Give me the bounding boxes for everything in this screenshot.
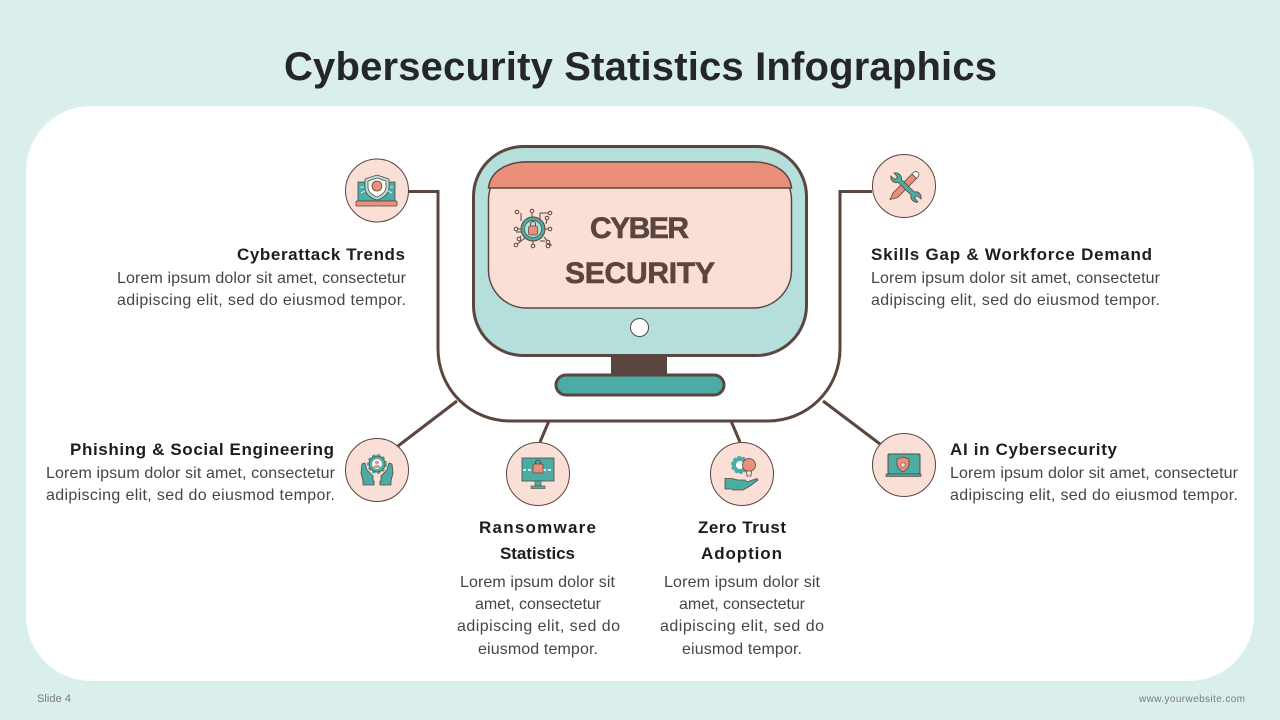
monitor stand xyxy=(611,354,667,376)
heading: Skills Gap & Workforce Demand xyxy=(871,245,1152,264)
item: Phishing & Social Engineering xyxy=(46,438,408,504)
item: Skills Gap & Workforce Demand xyxy=(871,154,1161,309)
title: Cybersecurity Statistics Infographics xyxy=(284,45,997,89)
icon circle: laptop shield xyxy=(346,159,408,222)
monitor body xyxy=(474,146,806,356)
monitor screen xyxy=(488,162,792,308)
monitor label xyxy=(565,212,715,290)
heading: Zero Trust xyxy=(698,518,786,537)
monitor base xyxy=(556,375,724,395)
body text: amet, consectetur xyxy=(475,596,602,613)
body text xyxy=(950,465,1239,504)
item: AI in Cybersecurity xyxy=(872,434,1239,504)
heading: Adoption xyxy=(701,544,782,563)
body text: adipiscing elit, sed do xyxy=(457,618,620,635)
item: Cyberattack Trends xyxy=(117,159,408,309)
body text xyxy=(117,270,407,309)
footer: slide number: Slide 4 xyxy=(37,693,71,705)
body text: Lorem ipsum dolor sit amet, consectetur xyxy=(117,270,407,287)
screen header band xyxy=(488,162,792,188)
body text: adipiscing elit, sed do eiusmod tempor. xyxy=(950,487,1238,504)
monitor label: SECURITY xyxy=(565,257,715,290)
icon circle: hand with gear and bulb xyxy=(710,442,774,506)
body text: adipiscing elit, sed do eiusmod tempor. xyxy=(117,292,406,309)
body text: Lorem ipsum dolor sit amet, consectetur xyxy=(950,465,1239,482)
body text: Lorem ipsum dolor sit amet, consectetur xyxy=(46,465,336,482)
icon circle: hands and gear xyxy=(346,438,408,502)
body text xyxy=(871,270,1161,309)
body text xyxy=(46,465,336,504)
monitor label: CYBER xyxy=(590,212,689,245)
body text: eiusmod tempor. xyxy=(478,641,598,658)
body text xyxy=(660,574,824,658)
heading: AI in Cybersecurity xyxy=(950,440,1118,459)
body text: adipiscing elit, sed do eiusmod tempor. xyxy=(46,487,335,504)
icon circle: monitor lock xyxy=(506,442,570,506)
icon circle: laptop with shield xyxy=(872,434,936,496)
body text: Lorem ipsum dolor sit xyxy=(460,574,616,591)
item: Zero Trust Adoption xyxy=(660,442,824,658)
heading: Statistics xyxy=(500,544,575,563)
heading: Phishing & Social Engineering xyxy=(70,440,334,459)
item: Ransomware Statistics xyxy=(457,442,620,658)
icon circle: tools xyxy=(872,154,936,218)
connector lines xyxy=(398,192,880,446)
body text: eiusmod tempor. xyxy=(682,641,802,658)
heading xyxy=(479,518,596,563)
heading xyxy=(698,518,786,563)
heading: Cyberattack Trends xyxy=(237,245,405,264)
body text: amet, consectetur xyxy=(679,596,806,613)
power button xyxy=(630,318,648,336)
central monitor xyxy=(474,146,806,395)
body text: Lorem ipsum dolor sit amet, consectetur xyxy=(871,270,1161,287)
body text: Lorem ipsum dolor sit xyxy=(664,574,821,591)
body text: adipiscing elit, sed do eiusmod tempor. xyxy=(871,292,1160,309)
footer: website: www.yourwebsite.com xyxy=(1138,694,1245,705)
body text: adipiscing elit, sed do xyxy=(660,618,824,635)
panel: white content card xyxy=(26,106,1254,681)
icon: circuit lock xyxy=(514,209,552,248)
body text xyxy=(457,574,620,658)
heading: Ransomware xyxy=(479,518,596,537)
